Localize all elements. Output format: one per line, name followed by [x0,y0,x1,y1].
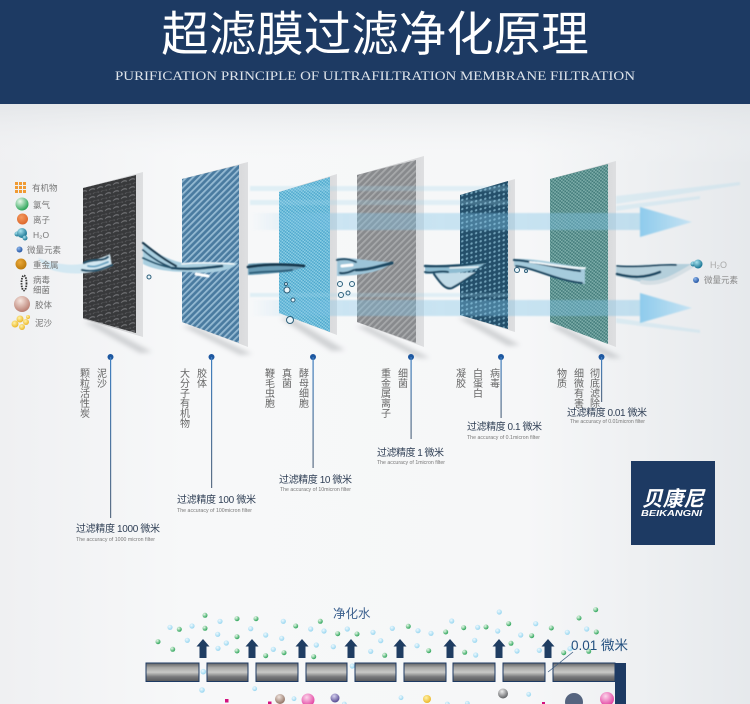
panel 5: dark blue membrane [460,179,515,332]
output legend [690,260,739,285]
header banner [0,0,750,104]
output label: trace elements: 微量元素 [704,275,739,285]
callout: 1000 micron: 泥沙 [94,367,106,388]
panel 4: grey carbon membrane [357,156,424,347]
callout: 0.01 micron: 物质 [554,367,566,389]
callout: 1 micron: 重金属离子 [378,367,390,418]
legend label: virus bacteria: 细菌 [33,285,50,295]
icon: H2O molecule [14,228,28,240]
legend label: organic: 有机物 [32,183,58,193]
output label: H2O: H₂O [710,260,727,270]
callout: 0.01 micron [554,354,647,425]
callout: 10 micron: 酵母细胞 [296,368,308,409]
legend label: H2O: H₂O [33,230,49,240]
brand logo: BEIKANGNI [641,509,703,518]
water stream [38,243,692,288]
panel 3: cyan check membrane [279,174,337,335]
callout: 0.1 micron: The accuracy of 0.1micron filter [467,435,540,441]
icon: ion [17,214,28,224]
stream: panel 5 to panel 6 [514,259,585,284]
stream: panel 1 to panel 2 [143,243,238,276]
callout: 10 micron: 过滤精度 10 微米 [279,473,352,486]
thin streams [250,182,740,333]
icon: virus [22,276,26,290]
callout: 10 micron: The accuracy of 10micron filter [280,487,351,493]
legend label: colloid: 胶体 [35,300,53,310]
stream: into panel 1 [38,254,112,273]
legend: input substances [12,182,62,330]
subtitle: PURIFICATION PRINCIPLE OF ULTRAFILTRATION MEMBRANE FILTRATION [115,68,636,83]
callout: 10 micron: 真菌 [280,367,292,389]
upper arrow [250,207,692,237]
icon: trace element output [693,277,699,283]
callout: 100 micron: 胶体 [194,367,206,389]
panel shadows [84,318,622,358]
icon: colloid [14,296,30,312]
callout: 10 micron: 鞭毛虫胞 [262,367,274,409]
label: purified water: 净化水 [333,607,371,621]
callout: 10 micron [262,354,352,493]
purified water particles: green [156,607,599,659]
stream: panel 6 to output [616,264,692,283]
icon: trace elements [16,246,22,252]
icon: heavy metal [16,258,26,270]
callout: 0.1 micron: 病毒 [488,367,500,389]
legend label: virus bacteria: 病毒 [33,275,51,285]
callout: 0.1 micron [454,354,542,441]
pore callout: 0.01 micron: 0.01 微米 [571,638,629,653]
callout: 100 micron: 大分子有机物 [178,367,190,429]
flow-through up arrows [196,639,554,658]
purified water particles: blue [167,609,589,704]
callout: 1000 micron: The accuracy of 1000 micron filter [76,537,155,543]
legend label: trace elements: 微量元素 [27,245,62,255]
panel 6: teal membrane [550,161,616,347]
callout: 1000 micron: 过滤精度 1000 微米 [76,522,160,535]
lower arrow [250,293,692,323]
brand logo: ® [703,488,706,493]
legend label: virus bacteria [33,275,51,295]
callout: 1000 micron [76,354,160,543]
brand logo: 贝康尼 [642,487,706,511]
panel 2: blue stripe membrane [182,162,248,347]
icon: H2O output [690,260,702,268]
callout: 0.1 micron: 过滤精度 0.1 微米 [467,420,542,433]
icon: organic matter [15,182,26,193]
stream: panel 2 to panel 3 [248,263,306,275]
membrane diagram [146,607,629,704]
membrane segments [146,663,615,682]
callout: 0.01 micron: 过滤精度 0.01 微米 [567,406,647,419]
callout: 0.01 micron: The accuracy of 0.01micron filter [570,419,645,425]
water droplets [147,268,528,324]
callout: 0.1 micron: 白蛋白 [470,367,482,398]
stream: panel 4 to panel 5 [425,262,486,288]
legend label: heavy metal: 重金属 [33,260,59,270]
legend label: silt: 泥沙 [35,318,53,328]
membrane wall [615,663,626,704]
filter panels [83,156,616,347]
pore callout: 0.01 micron [548,638,629,672]
callout: 1 micron: 过滤精度 1 微米 [377,446,444,459]
callout: 100 micron: 过滤精度 100 微米 [177,493,256,506]
icon: chlorine [16,198,28,210]
callout: 100 micron [177,354,256,514]
callout: 1000 micron: 颗粒活性炭 [78,368,90,419]
callout: 100 micron: The accuracy of 100micron filter [177,508,252,514]
callout: 1 micron [377,354,445,466]
title: 超滤膜过滤净化原理 [161,9,589,62]
legend label: ion: 离子 [33,215,51,225]
panel 1: activated carbon [83,172,143,337]
callout: 0.01 micron: 彻底滤除 [588,368,600,408]
callout: 1 micron: 细菌 [396,367,408,389]
legend label: chlorine: 氯气 [33,200,51,210]
icon: silt [12,315,30,330]
flow arrows [250,182,740,333]
contaminant particles [225,688,614,704]
callout: 1 micron: The accuracy of 1micron filter [377,460,445,466]
brand logo [631,461,715,545]
stream: panel 3 to panel 4 [337,258,393,276]
callout: 0.01 micron: 细微有害 [572,367,584,409]
callout: 0.1 micron: 凝胶 [454,368,466,389]
